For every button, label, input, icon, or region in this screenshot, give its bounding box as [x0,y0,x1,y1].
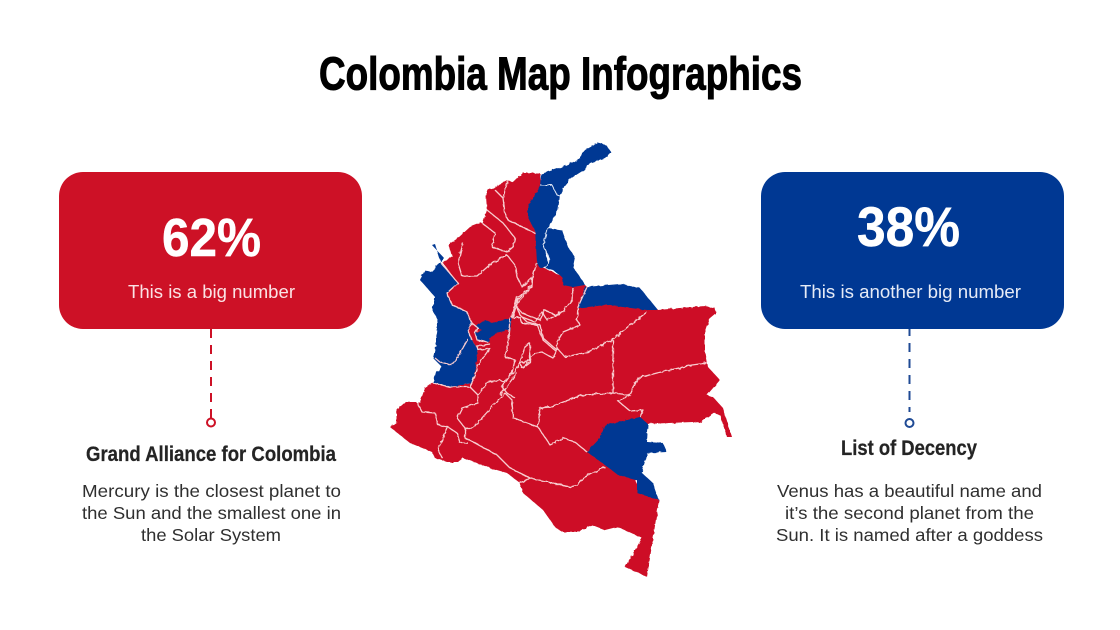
panel: left stat card [59,172,362,329]
map: blue central arm [475,318,512,342]
left big number: 62% [162,208,261,268]
right heading: List of Decency [841,437,977,460]
map: blue Arauca region [578,284,658,310]
map of Colombia [390,143,732,577]
left text block: Mercury is the closest planet to [82,481,341,501]
right text block: it’s the second planet from the [785,503,1034,523]
connector: left dashed line [207,329,215,426]
map: blue south-east region [587,417,667,500]
map: department borders [417,180,707,487]
right big number: 38% [857,195,960,258]
left heading: Grand Alliance for Colombia [86,443,336,466]
left caption: This is a big number [128,282,295,302]
right text block: Venus has a beautiful name and [777,481,1042,501]
left text block [82,481,341,545]
right caption: This is another big number [800,282,1021,302]
right text block: Sun. It is named after a goddess [776,525,1043,545]
left text block: the Sun and the smallest one in [82,503,341,523]
map: red regions [390,173,732,577]
right text block [776,481,1043,545]
connector: right dashed line [906,329,914,427]
left text block: the Solar System [141,525,281,545]
panel: right stat card [761,172,1064,329]
title: Colombia Map Infographics [319,48,802,100]
map: blue northern region [528,143,611,268]
map: blue Pacific region [420,244,478,387]
map: blue north-east region [543,228,585,287]
